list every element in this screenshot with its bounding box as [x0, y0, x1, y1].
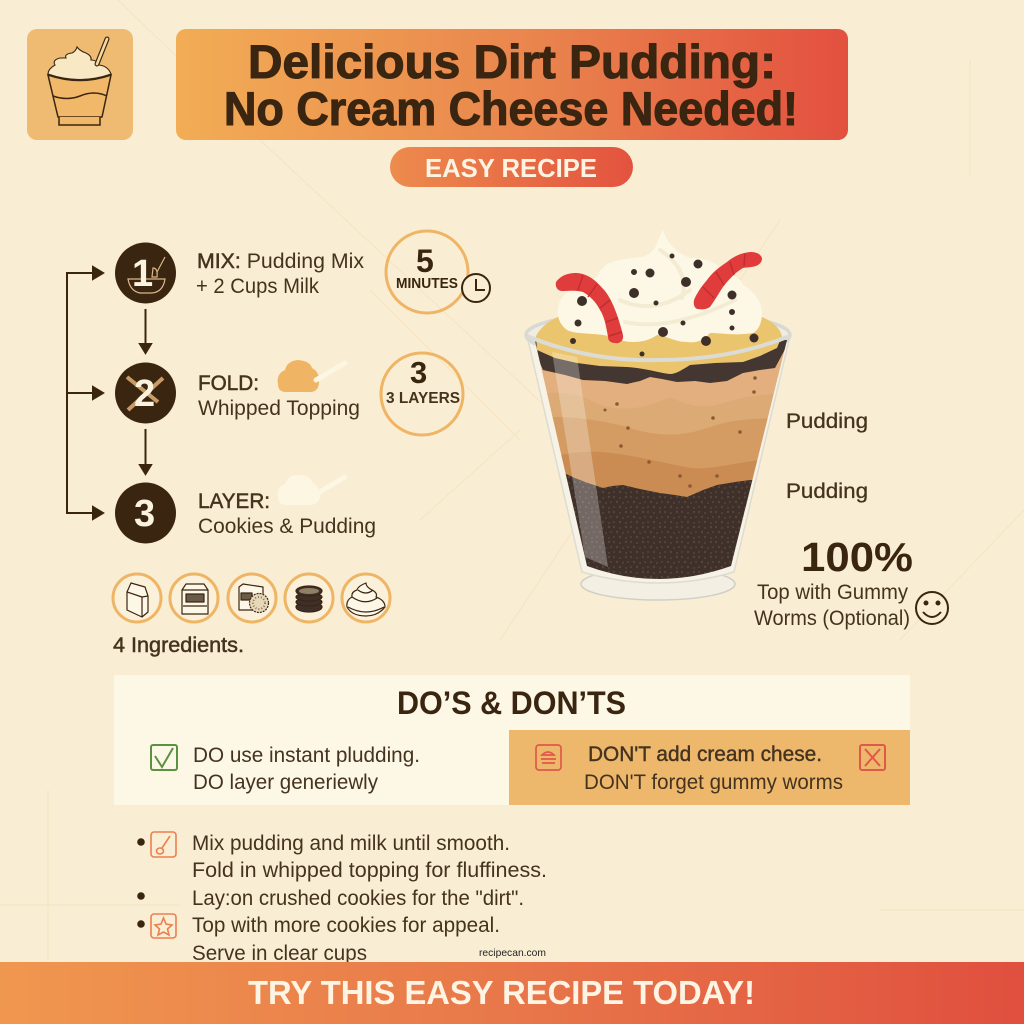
badge: 3 layers: 3 [410, 355, 427, 390]
cup label: pudding lower: Pudding [786, 480, 868, 503]
panel: do's and don'ts [114, 675, 910, 805]
process arrows [67, 267, 151, 519]
title banner: Delicious Dirt Pudding: [248, 35, 776, 88]
don't box [509, 730, 910, 805]
ingredient icons [113, 574, 390, 622]
step 2: fold: 2 [134, 373, 155, 415]
heading: DO’S & DON’TS [397, 685, 626, 721]
badge: 5 minutes [386, 231, 490, 313]
icon: star [151, 914, 176, 938]
step 1: mix: MIX: Pudding Mix [197, 250, 364, 273]
step 3: layer: LAYER: [198, 490, 270, 513]
icon: spoon [151, 832, 176, 857]
ingredients caption: 4 Ingredients. [113, 634, 244, 657]
instructions list: Fold in whipped topping for fluffiness. [192, 859, 547, 882]
step 1: mix [115, 242, 364, 304]
do text [193, 744, 420, 794]
cup contents [530, 340, 790, 590]
step 2: fold [115, 360, 360, 424]
step 2: fold: Whipped Topping [198, 397, 360, 420]
cookie crumbs [570, 254, 758, 356]
icon: milk carton [127, 583, 148, 617]
title banner [176, 29, 848, 140]
don't text [584, 743, 843, 794]
don't text: DON'T forget gummy worms [584, 771, 843, 794]
step 3: layer [115, 475, 376, 544]
footer banner: TRY THIS EASY RECIPE TODAY! [248, 974, 755, 1011]
icon: check [151, 745, 177, 770]
gummy worms [556, 252, 762, 343]
icon: cookie stack [296, 586, 322, 612]
do text: DO layer generiewly [193, 771, 378, 794]
step 3: layer: Cookies & Pudding [198, 515, 376, 538]
subtitle pill: EASY RECIPE [425, 153, 597, 183]
header icon: pudding cup [27, 29, 133, 140]
note: gummy worms: Worms (Optional) [754, 607, 910, 630]
instructions list: Mix pudding and milk until smooth. [192, 832, 510, 855]
glass highlight [552, 352, 608, 567]
badge: 5 minutes: 5 [416, 243, 434, 279]
glass body [527, 336, 790, 583]
step 2: fold: FOLD: [198, 372, 259, 395]
title banner: No Cream Cheese Needed! [224, 82, 798, 135]
illustration: layered dirt pudding cup [526, 230, 790, 600]
stat: 100%: 100% [801, 534, 913, 580]
don't text: DON'T add cream chese. [588, 743, 822, 766]
subtitle pill [390, 147, 633, 187]
icon: whipped topping scoop [278, 360, 345, 392]
note: gummy worms: Top with Gummy [757, 581, 908, 604]
top pudding layer [536, 316, 782, 374]
icon: cookie package [239, 584, 268, 612]
icon: cross [860, 745, 885, 770]
step 3: layer: 3 [134, 493, 155, 535]
icon: pudding mix box [182, 584, 208, 614]
cup label: pudding upper: Pudding [786, 410, 868, 433]
icon: cookie scoop [278, 475, 345, 505]
watermark: recipecan.com [479, 947, 546, 959]
step 1: mix: + 2 Cups Milk [196, 275, 319, 298]
whipped cream [558, 230, 762, 342]
badge: 3 layers [381, 353, 463, 435]
icon: layered cup warning [536, 745, 561, 770]
instructions list: Serve in clear cups [192, 942, 367, 965]
instructions list: Top with more cookies for appeal. [192, 914, 500, 937]
do text: DO use instant pludding. [193, 744, 420, 767]
cup front rim [527, 336, 790, 360]
note: gummy worms [754, 581, 910, 630]
instructions list [137, 832, 547, 965]
cup base [581, 568, 735, 600]
step 1: mix: 1 [132, 253, 153, 295]
icon: whipped cream [347, 583, 385, 616]
badge: 5 minutes: MINUTES [396, 275, 458, 292]
icon: smiley [916, 592, 948, 624]
footer banner [0, 962, 1024, 1024]
instructions list: Lay:on crushed cookies for the "dirt". [192, 887, 524, 910]
badge: 3 layers: 3 LAYERS [386, 390, 460, 407]
